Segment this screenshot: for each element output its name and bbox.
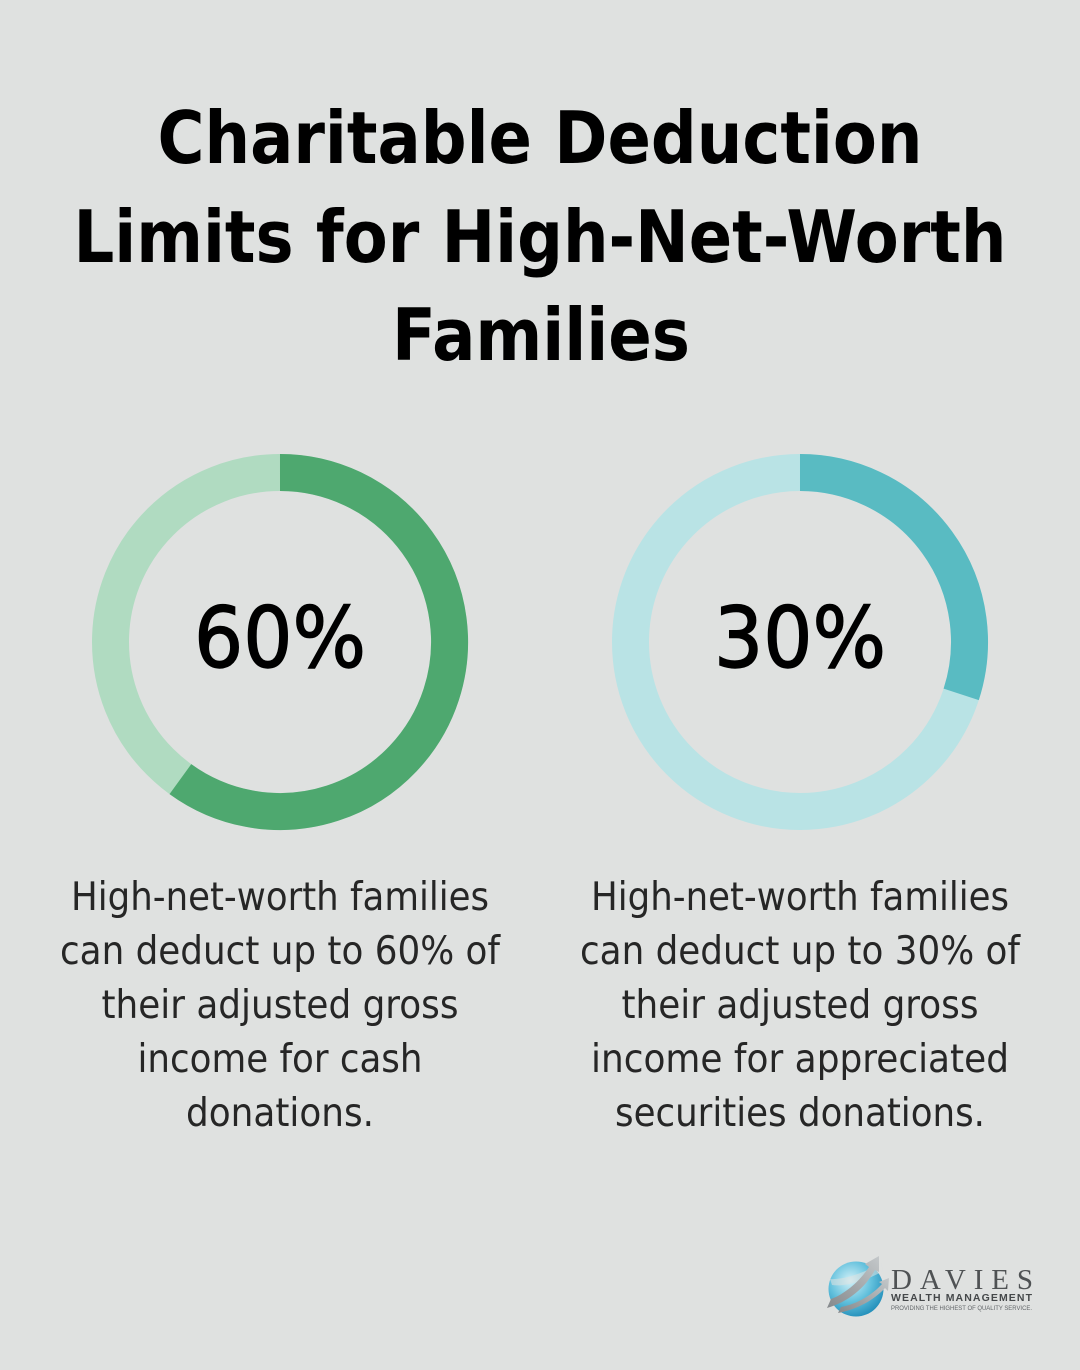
text: 60% description: High-net-worth families [71,875,489,920]
donut chart: 60% [110,472,450,812]
text: 30% description [580,875,1021,1136]
donut chart: 30% [630,472,970,812]
logo: Davies Wealth Management: PROVIDING THE HIGHEST OF QUALITY SERVICE. [891,1305,1032,1312]
text: 60% description: donations. [186,1091,374,1136]
logo wordmark: DAVIES [891,1264,1033,1296]
text: 60% description: their adjusted gross [102,983,458,1028]
logo: Davies Wealth Management: WEALTH MANAGEMENT [891,1292,1033,1304]
text: 30% description: securities donations. [615,1091,985,1136]
donut chart: 30%: 30% [714,589,886,687]
text: 30% description: their adjusted gross [622,983,978,1028]
logo: Davies Wealth Management [827,1256,1033,1316]
text: 30% description: High-net-worth families [591,875,1009,920]
text: 60% description [60,875,501,1136]
text: 30% description: can deduct up to 30% of [580,929,1021,974]
text: 60% description: can deduct up to 60% of [60,929,501,974]
text: 60% description: income for cash [138,1037,422,1082]
panel: 60% cash donations [60,472,501,1136]
title [74,96,1006,377]
icon: globe with arrows [827,1256,889,1316]
donut chart: 60%: 60% [194,589,366,687]
title: Families [392,293,690,377]
title: Charitable Deduction [158,96,922,180]
panel: 30% appreciated securities [580,472,1021,1136]
text: 30% description: income for appreciated [591,1037,1009,1082]
